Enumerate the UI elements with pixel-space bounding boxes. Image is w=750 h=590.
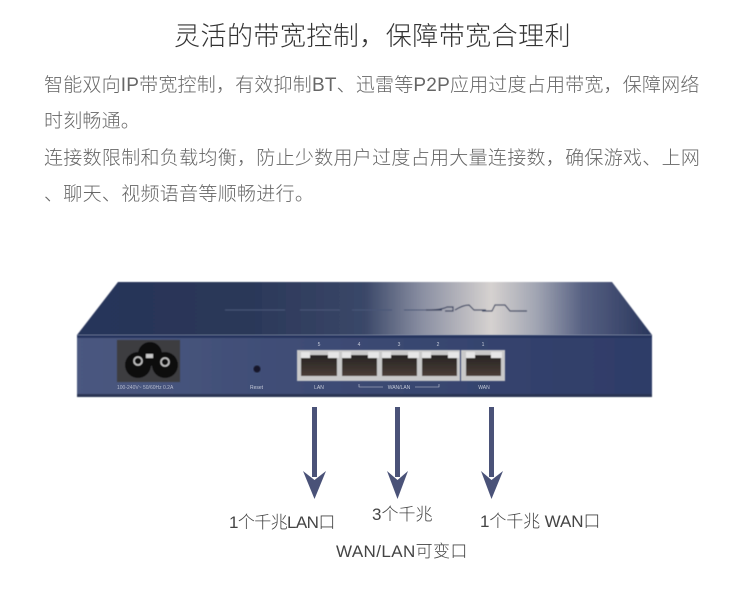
port labels: 5: [318, 342, 321, 348]
port labels: 4: [358, 342, 361, 348]
port labels: 3: [398, 342, 401, 348]
label: WAN/LAN: WAN/LAN可变口: [336, 542, 468, 561]
router top cover: [77, 282, 652, 335]
title: 灵活的带宽控制，保障带宽合理利: [174, 21, 571, 51]
label: WAN: 1个千兆 WAN口: [480, 512, 600, 531]
power rating label: 100-240V~ 50/60Hz 0.2A: [117, 385, 174, 391]
power socket: [117, 340, 180, 382]
text block: connection limits: 连接数限制和负载均衡，防止少数用户过度占用大量连接数，确保游戏、上网: [44, 148, 700, 169]
port labels: 1: [482, 342, 485, 348]
text block: connection limits: [44, 148, 700, 205]
WAN port: [461, 350, 505, 381]
label: 3 ports: 3个千兆: [372, 505, 432, 524]
label: LAN: 1个千兆LAN口: [229, 513, 335, 532]
text block: connection limits: 、聊天、视频语音等顺畅进行。: [44, 184, 314, 205]
reset button: Reset: [250, 385, 264, 391]
arrow: LAN: [303, 407, 326, 499]
port labels: [314, 342, 490, 391]
text block: bandwidth control: 时刻畅通。: [44, 111, 140, 132]
port labels: 2: [437, 342, 440, 348]
port labels: WAN/LAN: [388, 385, 411, 391]
text block: bandwidth control: 智能双向IP带宽控制，有效抑制BT、迅雷等P2P应用过度占用带宽，保障网络: [44, 75, 700, 96]
port labels: LAN: [314, 385, 324, 391]
LAN and WAN/LAN ports: [297, 350, 460, 381]
reset button: [250, 366, 264, 391]
arrow: WAN/LAN: [387, 407, 408, 499]
router front panel: [77, 335, 652, 397]
port labels: WAN: [478, 385, 490, 391]
arrow: WAN: [481, 407, 503, 499]
text block: bandwidth control: [44, 74, 700, 132]
